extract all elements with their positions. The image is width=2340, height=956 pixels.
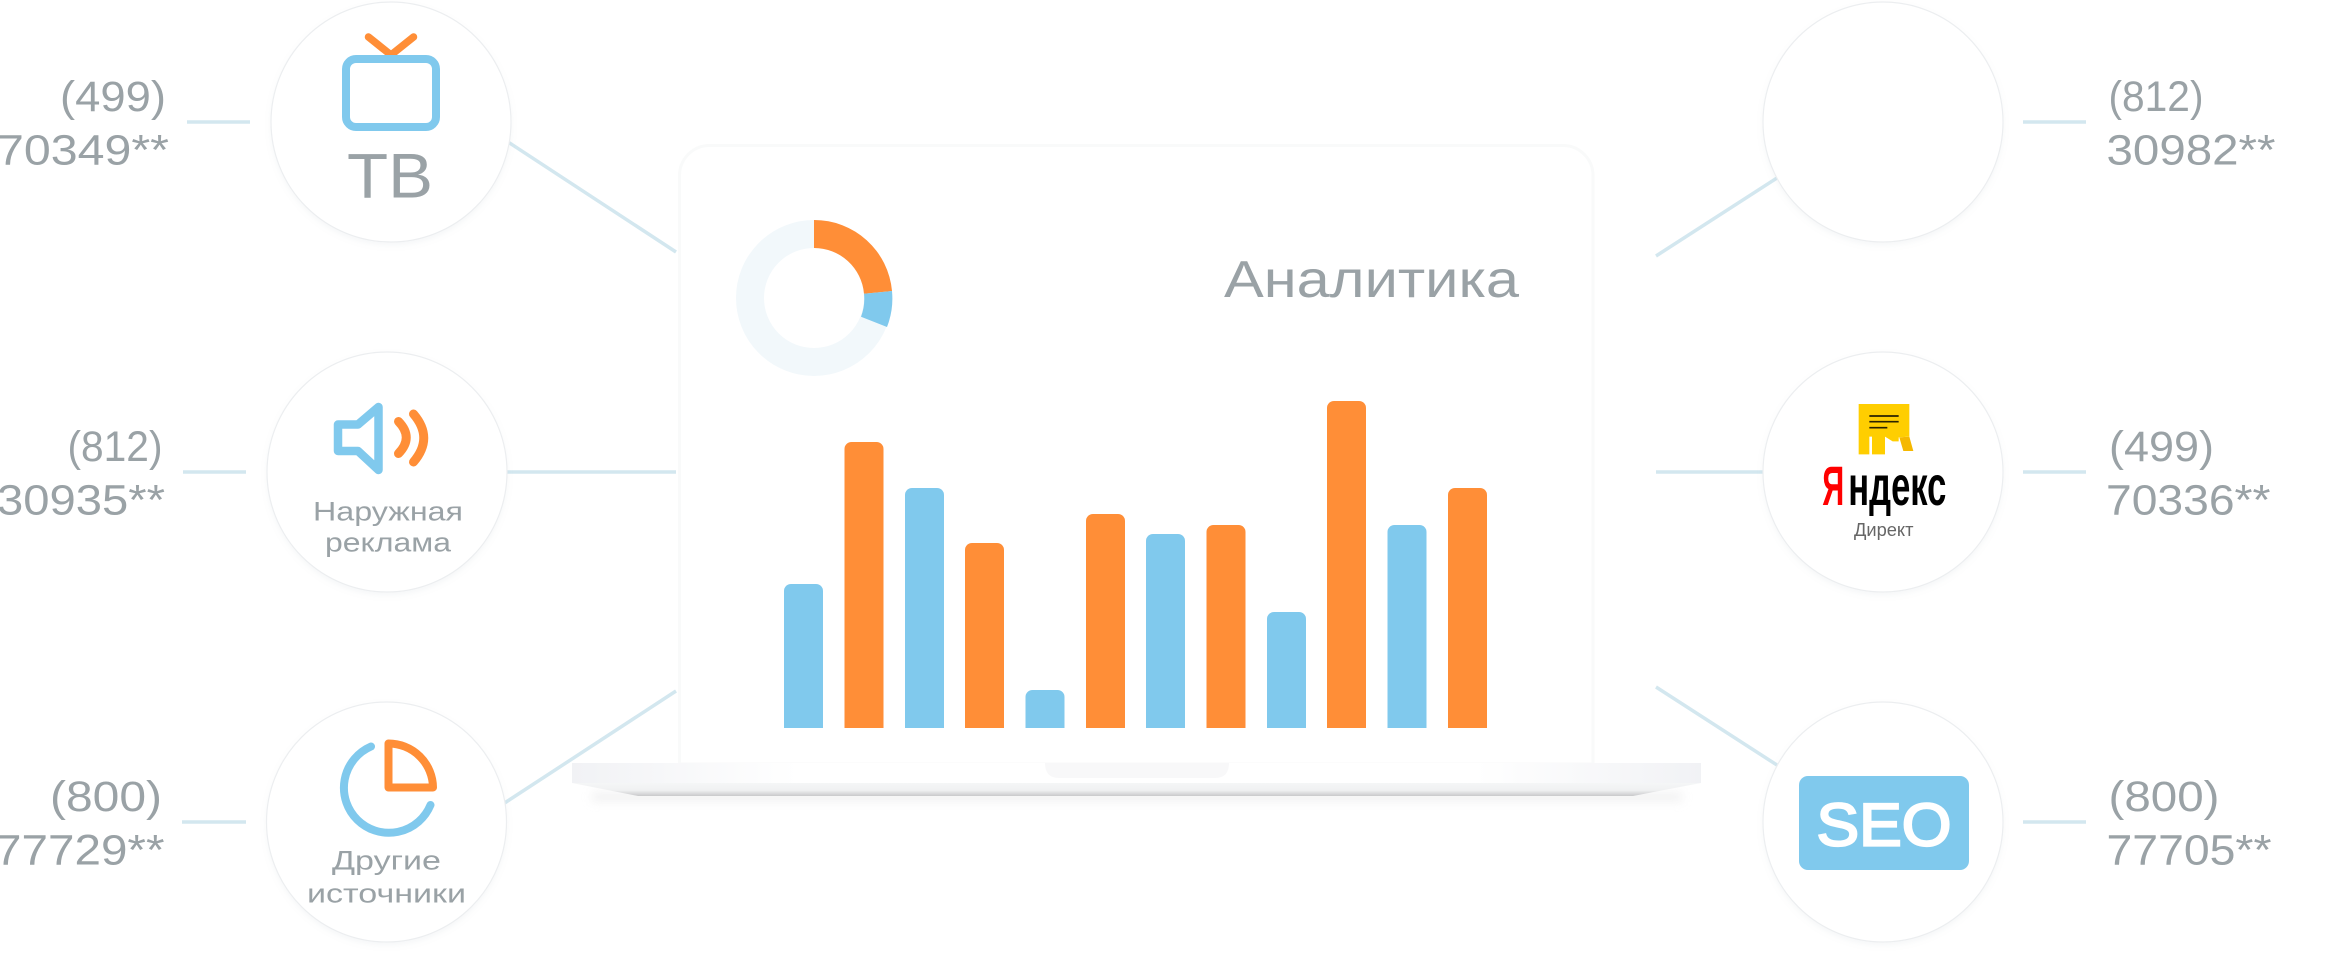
connector lines from sources to laptop — [500, 140, 1780, 806]
Yandex logotype: ндекс — [1848, 454, 1946, 517]
other label — [307, 845, 466, 909]
phone numbers right — [2106, 73, 2276, 874]
other label: Другие — [332, 845, 441, 875]
outdoor label: реклама — [325, 528, 452, 558]
phone TV: 70349** — [0, 126, 169, 174]
donut orange segment — [814, 220, 892, 294]
phone top right: (812) — [2108, 73, 2204, 121]
phone SEO — [2106, 773, 2272, 874]
phone Yandex — [2106, 423, 2271, 524]
bar 10 — [1327, 401, 1366, 728]
Yandex circle — [1763, 352, 2003, 592]
bar chart — [784, 401, 1487, 728]
bar 9 — [1267, 612, 1306, 728]
phone other — [0, 773, 165, 874]
phone TV: (499) — [60, 73, 166, 121]
source: other — [266, 702, 506, 942]
phone Yandex: 70336** — [2106, 476, 2271, 524]
phone SEO: 77705** — [2106, 826, 2272, 874]
phone SEO: (800) — [2108, 773, 2220, 821]
source: outdoor advertising — [267, 352, 507, 592]
phone outdoor — [0, 423, 165, 524]
laptop — [572, 146, 1701, 801]
phone top right: 30982** — [2106, 126, 2276, 174]
icon: television — [346, 37, 436, 127]
source: empty circle top right — [1763, 2, 2003, 242]
SEO badge: SEO — [1816, 792, 1952, 859]
laptop base — [572, 763, 1701, 783]
donut blue segment — [861, 291, 892, 327]
bar 7 — [1146, 534, 1185, 728]
bar 2 — [844, 442, 884, 728]
icon: pie chart — [344, 744, 433, 833]
laptop screen — [680, 146, 1593, 764]
bar 8 — [1206, 525, 1246, 728]
laptop base underside — [572, 783, 1701, 796]
source: TV — [271, 2, 511, 242]
phone TV — [0, 73, 169, 174]
icon: Yandex Direct sign — [1859, 404, 1913, 454]
outdoor label — [313, 497, 463, 558]
phone numbers left — [0, 73, 169, 874]
bar 4 — [965, 543, 1004, 728]
phone other: (800) — [50, 773, 162, 821]
dashes between circles and phone numbers — [182, 122, 2086, 822]
source: SEO — [1763, 702, 2003, 942]
Direct label: Директ — [1854, 520, 1914, 540]
title: Аналитика — [1224, 251, 1519, 309]
phone top right — [2106, 73, 2276, 174]
bar 6 — [1086, 514, 1125, 728]
TV label: ТВ — [347, 142, 433, 212]
bar 5 — [1026, 690, 1064, 728]
bar 3 — [905, 488, 944, 728]
outdoor circle — [267, 352, 507, 592]
icon: speaker — [338, 407, 424, 470]
laptop notch — [1045, 763, 1229, 778]
phone outdoor: (812) — [68, 423, 162, 471]
bar 1 — [784, 584, 823, 728]
SEO badge — [1799, 776, 1969, 870]
laptop shadow — [592, 793, 1682, 801]
other label: источники — [307, 879, 466, 909]
TV circle — [271, 2, 511, 242]
source: Yandex Direct — [1763, 352, 2003, 592]
outdoor label: Наружная — [313, 497, 463, 527]
bar 11 — [1388, 525, 1426, 728]
Yandex logotype — [1822, 454, 1946, 517]
Yandex logotype: Я — [1822, 454, 1844, 517]
bar 12 — [1448, 488, 1487, 728]
other circle — [266, 702, 506, 942]
phone outdoor: 30935** — [0, 476, 165, 524]
phone Yandex: (499) — [2109, 423, 2214, 471]
donut chart — [750, 220, 892, 362]
SEO circle — [1763, 702, 2003, 942]
donut track — [750, 234, 878, 362]
